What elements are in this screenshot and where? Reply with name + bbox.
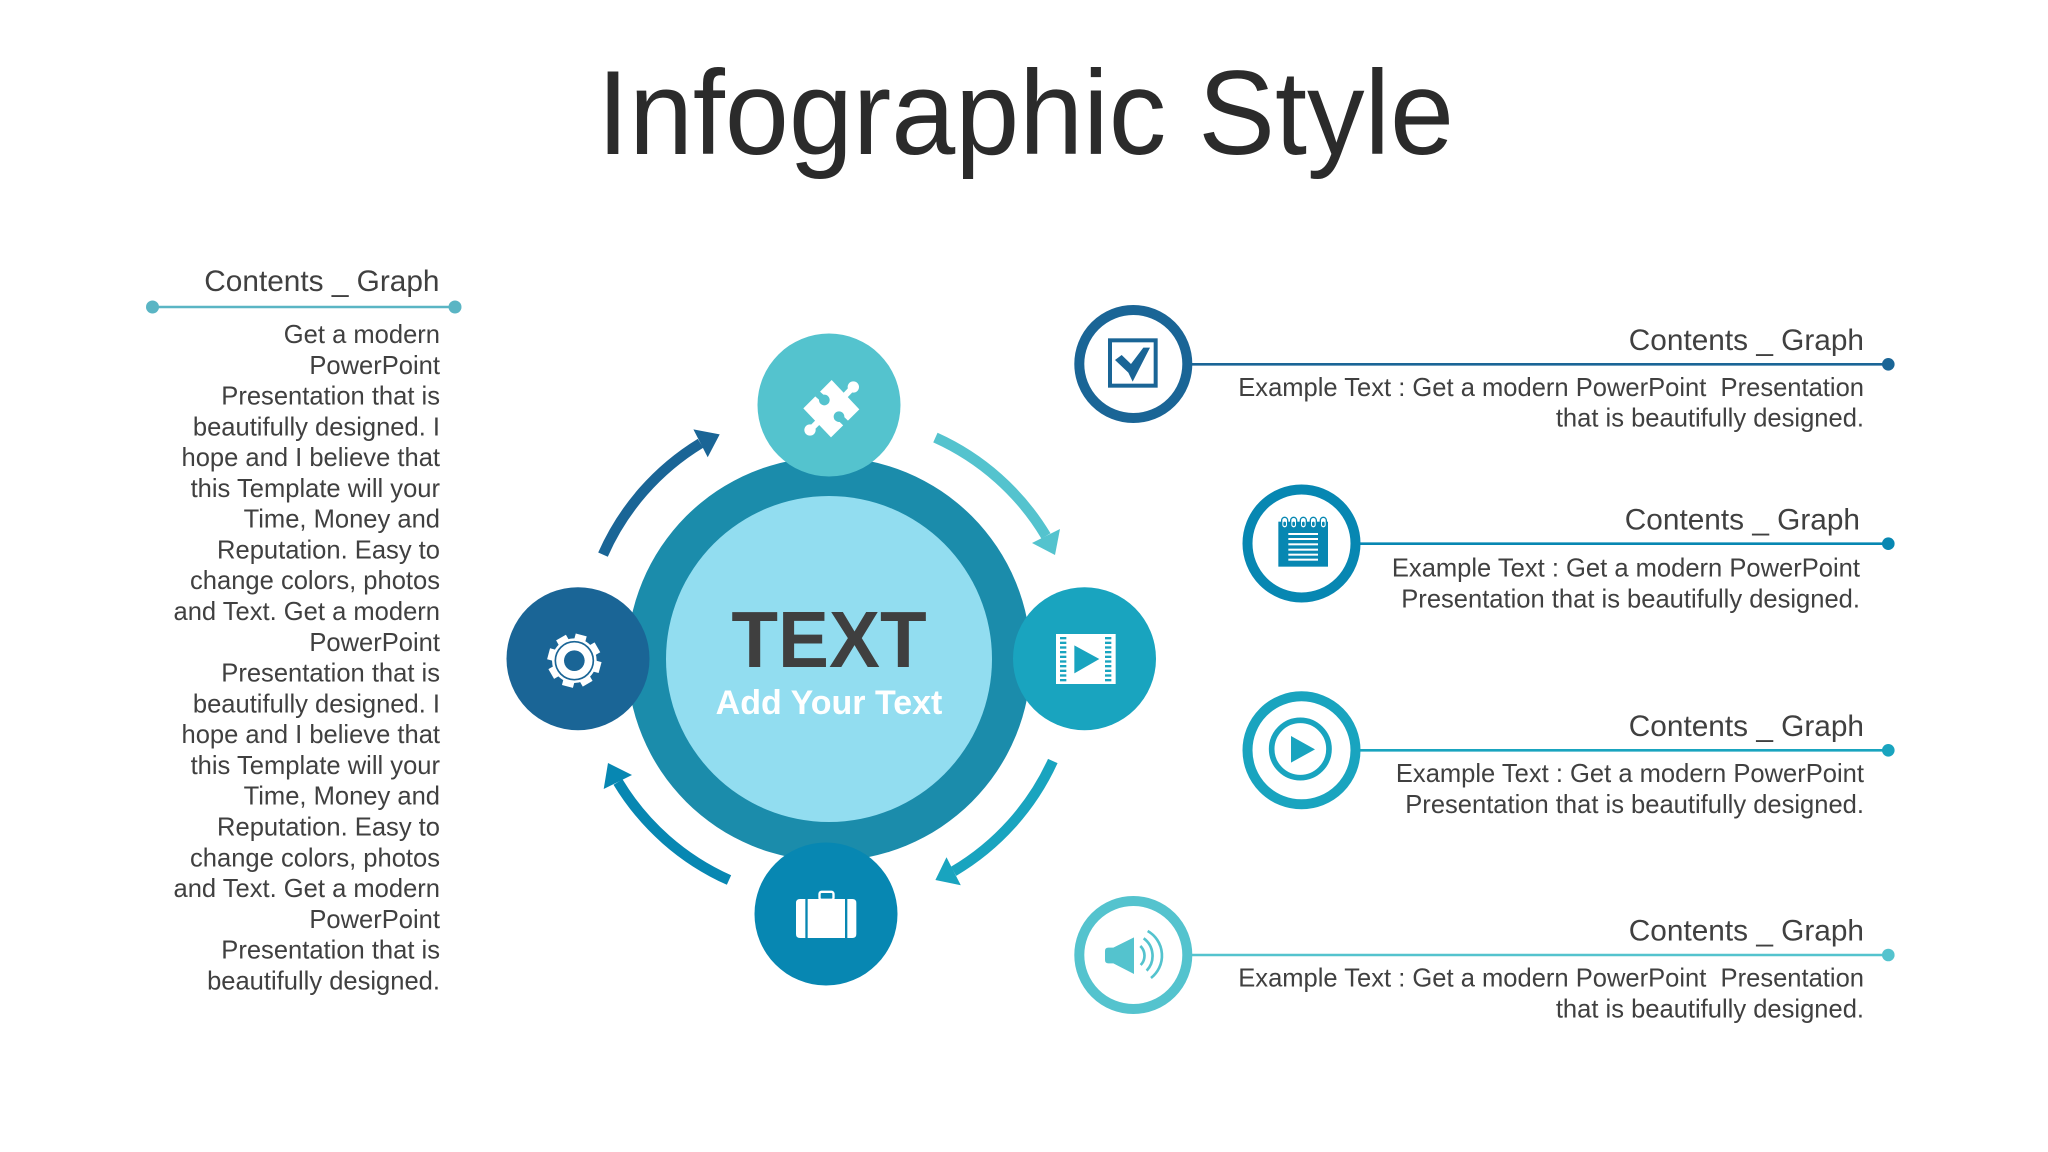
left panel body text: this Template will your [191,475,440,503]
node: puzzle [758,334,900,476]
description: Example Text : Get a modern PowerPoint [1396,760,1864,788]
outer ring [627,457,1031,861]
left panel body text: Get a modern [284,321,440,349]
left panel body text: change colors, photos [190,844,440,872]
center subheading: Add Your Text [716,684,942,722]
left panel body text: Presentation that is [221,383,440,411]
icon ring: play button [1248,696,1356,804]
heading: Contents _ Graph [1629,914,1864,948]
arrow: bottom to left [604,763,729,880]
description: Example Text : Get a modern PowerPoint Presentation [1238,964,1864,992]
node: briefcase [754,842,898,986]
icon: puzzle piece [803,380,859,437]
left panel body text: Reputation. Easy to [217,814,440,842]
inner circle [666,496,992,822]
node: gear [506,587,650,730]
left panel body text: PowerPoint [309,352,440,380]
row 3: play item [1248,696,1895,819]
heading: Contents _ Graph [1629,324,1864,357]
icon ring: notebook [1248,490,1356,598]
arrow: right to bottom [935,761,1053,885]
left panel body text: beautifully designed. [207,967,440,995]
icon: briefcase [796,892,856,938]
central hub diagram [506,334,1156,986]
arrow: left to top [603,429,720,555]
description: Presentation that is beautifully designed. [1405,791,1864,819]
left panel body text: beautifully designed. I [193,413,440,441]
row 2: notebook item [1248,490,1895,613]
icon: film strip with play [1056,634,1116,684]
center heading: TEXT [731,594,927,684]
left panel body text: hope and I believe that [181,721,440,749]
left panel body text: Presentation that is [221,660,440,688]
heading: Contents _ Graph [1629,710,1864,743]
left panel body text: Presentation that is [221,937,440,965]
left panel divider with end dots [146,300,462,314]
row 4: speaker item [1079,901,1895,1023]
title: Infographic Style [597,46,1454,180]
row 1: checkbox item [1079,310,1895,433]
arrow: top to right [935,438,1060,555]
left panel body text: PowerPoint [309,629,440,657]
left panel body text: beautifully designed. I [193,690,440,718]
left panel body text: and Text. Get a modern [173,598,440,626]
left panel body text: Time, Money and [244,783,440,811]
left panel body text: Time, Money and [244,506,440,534]
description: Example Text : Get a modern PowerPoint Presentation [1238,374,1864,402]
icon ring: checkbox [1079,310,1187,418]
connector line [1358,537,1895,550]
heading: Contents _ Graph [1625,504,1860,536]
connector line [1190,358,1895,371]
panel: left contents [146,265,462,995]
node: film [1013,587,1156,730]
description: that is beautifully designed. [1556,405,1864,433]
icon: gear [547,633,602,688]
left panel body text: change colors, photos [190,567,440,595]
left panel body text: this Template will your [191,752,440,780]
description: Presentation that is beautifully designed. [1401,585,1860,613]
description: that is beautifully designed. [1556,995,1864,1023]
left panel heading: Contents _ Graph [204,265,440,298]
left panel body text: Reputation. Easy to [217,536,440,564]
icon ring: speaker [1079,901,1187,1009]
description: Example Text : Get a modern PowerPoint [1392,554,1860,582]
connector line [1190,949,1895,961]
connector line [1358,744,1895,757]
left panel body text: and Text. Get a modern [173,875,440,903]
left panel body text: PowerPoint [309,906,440,934]
left panel body text: hope and I believe that [181,444,440,472]
